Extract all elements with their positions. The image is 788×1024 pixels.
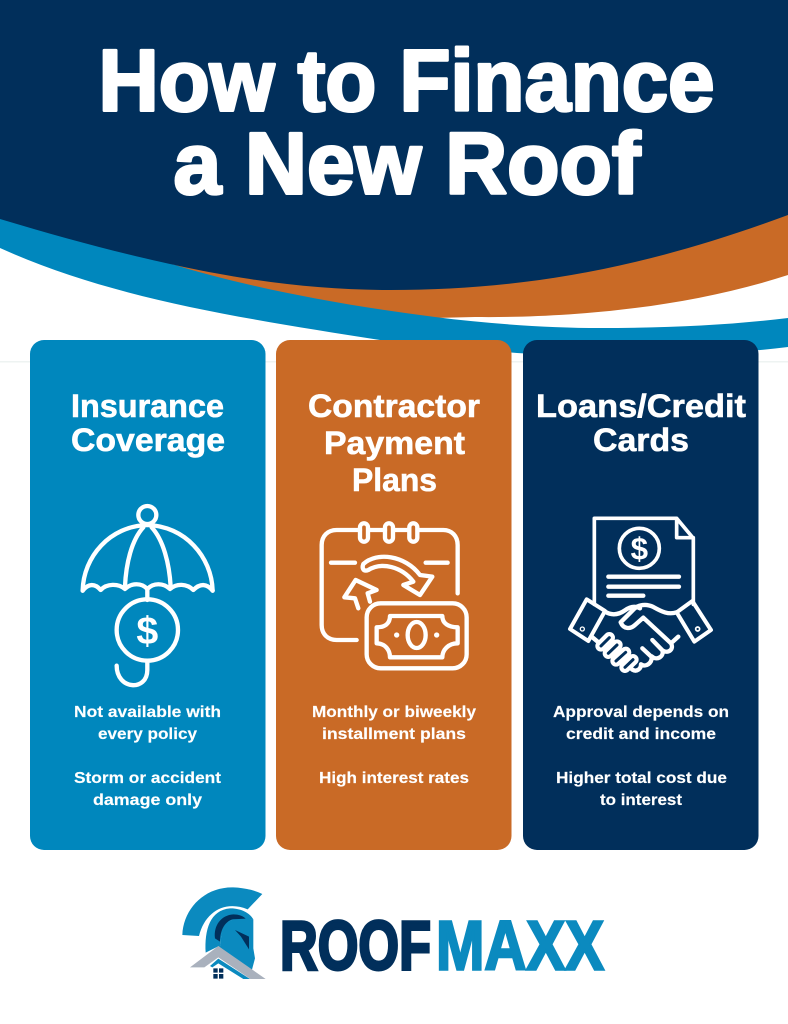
text: payment plan notes: High interest rates (319, 770, 469, 787)
text: payment plan notes (312, 704, 476, 787)
heading: loans and credit cards: Cards (593, 422, 689, 458)
title: How to Finance (98, 32, 714, 130)
text: payment plan notes: Monthly or biweekly (312, 704, 476, 721)
heading: insurance coverage (71, 388, 225, 458)
panel: loans and credit cards (523, 340, 758, 850)
wordmark (280, 906, 604, 984)
text: loan notes: credit and income (566, 726, 716, 743)
heading: contractor payment plans: Plans (352, 462, 437, 498)
heading: loans and credit cards (536, 388, 746, 458)
heading: contractor payment plans (308, 388, 480, 498)
text: insurance notes (74, 704, 221, 809)
icon: spartan helmet with roof (182, 887, 266, 979)
icon: calendar and money (322, 523, 467, 668)
text: loan notes (553, 704, 729, 809)
text: loan notes: to interest (600, 792, 682, 809)
panel: insurance coverage (30, 340, 266, 850)
logo: roofmaxx (182, 887, 604, 984)
icon: umbrella with dollar coin: $ (136, 609, 158, 653)
header swoosh background (0, 0, 788, 356)
text: loan notes: Approval depends on (553, 704, 729, 721)
heading: contractor payment plans: Contractor (308, 388, 480, 424)
text: loan notes: Higher total cost due (556, 770, 727, 787)
heading: loans and credit cards: Loans/Credit (536, 388, 746, 424)
text: insurance notes: Not available with (74, 704, 221, 721)
wordmark: ROOF (280, 906, 431, 984)
heading: contractor payment plans: Payment (324, 425, 465, 461)
icon: contract and handshake (570, 518, 711, 671)
text: insurance notes: damage only (93, 792, 202, 809)
heading: insurance coverage: Insurance (71, 388, 224, 424)
title (98, 32, 714, 212)
title: a New Roof (174, 116, 642, 212)
panel: contractor payment plans (276, 340, 512, 850)
heading: insurance coverage: Coverage (71, 422, 225, 458)
text: insurance notes: every policy (98, 726, 197, 743)
text: payment plan notes: installment plans (322, 726, 466, 743)
icon: contract and handshake: $ (631, 532, 648, 567)
wordmark: MAXX (436, 906, 604, 984)
icon: umbrella with dollar coin (83, 506, 213, 685)
text: insurance notes: Storm or accident (74, 770, 221, 787)
